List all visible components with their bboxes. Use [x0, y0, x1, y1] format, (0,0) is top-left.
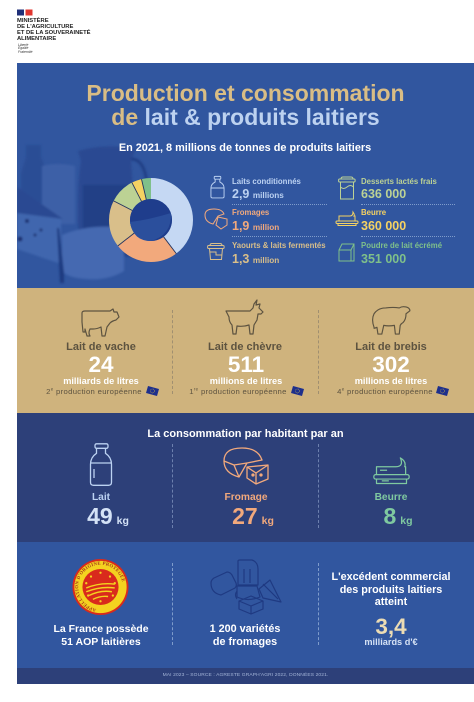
- value: trade surplus: 3,4: [375, 614, 407, 639]
- value: 8 kg: [383, 503, 413, 529]
- ministry name: [17, 17, 91, 42]
- legend item: desserts: [338, 176, 437, 201]
- value: 1,3 million: [232, 252, 279, 266]
- motto: Égalité: [18, 46, 28, 50]
- label: Yaourts & laits fermentés: [232, 240, 326, 250]
- icon: EU flag: [291, 386, 304, 396]
- stat: lait de chèvre: [189, 299, 304, 396]
- legend item: laits conditionnés: [210, 176, 301, 201]
- unit: trade surplus: milliards d'€: [364, 636, 418, 646]
- value: 24: [88, 352, 114, 377]
- label: Beurre: [375, 492, 407, 503]
- text: trade surplus: [332, 571, 450, 609]
- panel: consumption per capita: [17, 413, 474, 542]
- icon: bottle: [210, 176, 224, 198]
- text: AOP count: La France possède: [53, 623, 149, 635]
- panel: trade and varieties: [17, 542, 474, 668]
- panel: production header: [17, 63, 474, 288]
- stat: lait de vache: [46, 308, 159, 396]
- value: 2,9 millions: [232, 187, 284, 201]
- value: 351 000: [361, 252, 406, 266]
- unit: millions de litres: [210, 376, 282, 386]
- motto: Fraternité: [18, 50, 33, 54]
- value: 302: [372, 352, 410, 377]
- ranking: 2e production européenne: [46, 386, 142, 396]
- icon: butter: [372, 457, 411, 487]
- label: Lait de brebis: [355, 341, 427, 353]
- footer: source: MAI 2023 – SOURCE : AGRESTE GRAPH'AGRI 2022, DONNÉES 2021.: [163, 672, 328, 678]
- text: trade surplus: atteint: [375, 596, 407, 608]
- label: Poudre de lait écrémé: [361, 240, 442, 250]
- logo: ministry block: [17, 10, 91, 54]
- legend item: beurre: [336, 208, 406, 233]
- label: Fromages: [232, 208, 269, 217]
- icon: EU flag: [436, 386, 449, 396]
- icon: French flag marque: [17, 10, 32, 16]
- label: Lait de chèvre: [208, 341, 282, 353]
- stat: lait: [87, 443, 129, 529]
- footer: source: [17, 668, 474, 684]
- icon: assorted cheeses: [210, 559, 281, 614]
- ranking: 4e production européenne: [337, 386, 433, 396]
- icon: butter: [336, 210, 358, 226]
- value: 636 000: [361, 187, 406, 201]
- motto: [18, 42, 33, 54]
- stat: fromage: [223, 447, 274, 529]
- value: 511: [228, 352, 264, 377]
- chart: donut of dairy products: [109, 178, 193, 262]
- photo: dairy products background: [17, 146, 148, 284]
- icon: EU flag: [146, 386, 159, 396]
- label: Lait de vache: [66, 341, 136, 353]
- icon: milk carton: [338, 244, 354, 262]
- legend item: poudre: [338, 240, 442, 266]
- label: Laits conditionnés: [232, 176, 301, 186]
- ranking: 1re production européenne: [189, 386, 287, 396]
- panel: milk production: [17, 288, 474, 413]
- stat: beurre: [357, 441, 437, 531]
- ministry name: ET DE LA SOUVERAINETÉ: [17, 30, 91, 36]
- stat: lait de brebis: [337, 306, 449, 396]
- unit: millions de litres: [355, 376, 427, 386]
- label: Beurre: [361, 208, 386, 217]
- ministry name: ALIMENTAIRE: [17, 36, 56, 42]
- motto: Liberté: [18, 42, 28, 46]
- icon: sheep: [372, 306, 410, 335]
- text: AOP count: 51 AOP laitières: [61, 636, 141, 648]
- text: AOP count: [53, 623, 149, 648]
- value: 49 kg: [87, 503, 129, 529]
- label: Lait: [92, 492, 110, 503]
- text: cheese varieties: [210, 623, 280, 648]
- title: Production et consommation: [86, 80, 405, 106]
- icon: goat: [225, 299, 264, 335]
- label: Desserts lactés frais: [361, 176, 437, 186]
- heading: La consommation par habitant par an: [147, 428, 344, 440]
- label: Fromage: [224, 492, 268, 503]
- icon: cheese: [223, 447, 269, 485]
- title: de lait & produits laitiers: [111, 104, 380, 130]
- text: trade surplus: L'excédent commercial: [332, 571, 450, 583]
- icon: yogurt pot: [207, 243, 225, 260]
- icon: AOP seal: APPELLATION D'ORIGINE PROTÉGÉE: [75, 562, 126, 612]
- unit: milliards de litres: [63, 376, 139, 386]
- icon: cheese: [204, 208, 228, 230]
- value: 27 kg: [232, 503, 274, 529]
- ministry name: DE L'AGRICULTURE: [17, 24, 73, 30]
- icon: dessert pot: [338, 176, 356, 200]
- title: [86, 80, 405, 130]
- text: cheese varieties: de fromages: [213, 636, 277, 648]
- legend item: fromages: [204, 208, 279, 233]
- ministry name: MINISTÈRE: [17, 18, 49, 24]
- subtitle: En 2021, 8 millions de tonnes de produits laitiers: [119, 142, 371, 154]
- value: 360 000: [361, 219, 406, 233]
- text: trade surplus: des produits laitiers: [340, 584, 442, 596]
- legend item: yaourts: [207, 240, 326, 266]
- icon: bottle: [90, 443, 112, 486]
- value: 1,9 million: [232, 219, 279, 233]
- text: cheese varieties: 1 200 variétés: [210, 623, 280, 635]
- icon: cow: [81, 308, 120, 337]
